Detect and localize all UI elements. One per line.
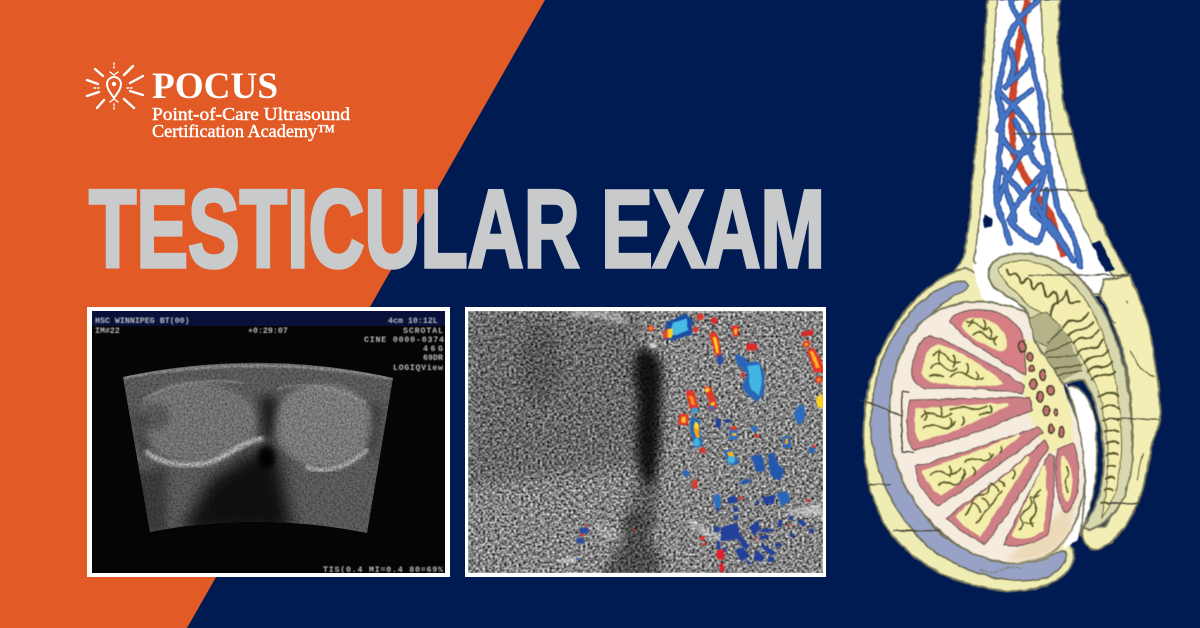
ultrasound overlay text: 46G bbox=[423, 345, 443, 354]
ultrasound overlay text: CINE 0000-0374 bbox=[364, 336, 444, 345]
epididymis bbox=[988, 253, 1161, 550]
testicular artery bbox=[1012, 0, 1064, 257]
white cavity bbox=[972, 263, 1095, 550]
testis body bbox=[890, 302, 1086, 564]
logo: POCUS bbox=[87, 63, 350, 141]
orange diagonal panel bbox=[0, 0, 545, 628]
doppler colour flow blobs bbox=[576, 313, 823, 572]
logo tagline line 2: Certification Academy™ bbox=[152, 121, 335, 141]
title: TESTICULAR EXAM bbox=[89, 168, 825, 291]
spermatic cord bbox=[950, 0, 1137, 300]
white sinus bbox=[1067, 386, 1097, 537]
ultrasound overlay text: HSC WINNIPEG BT(00) bbox=[95, 316, 190, 326]
efferent ductules bbox=[1028, 312, 1060, 347]
ultrasound overlay text: 69DR bbox=[423, 354, 443, 363]
ultrasound overlay text: IM#22 bbox=[95, 327, 120, 336]
doppler speckle image bbox=[467, 310, 823, 577]
lobule tubule fill bbox=[916, 319, 1071, 537]
ultrasound overlay text: 4cm 10:12L bbox=[388, 317, 438, 326]
logo tagline line 1: Point-of-Care Ultrasound bbox=[152, 104, 350, 124]
ultrasound overlay text: TIS(0.4 MI=0.4 80=69% bbox=[323, 565, 443, 575]
tubule squiggles bbox=[922, 320, 1068, 530]
ultrasound fan image bbox=[123, 362, 393, 533]
rete dots bbox=[1018, 341, 1064, 438]
logo wordmark: POCUS bbox=[152, 66, 278, 107]
ultrasound overlay text: SCROTAL bbox=[403, 327, 443, 336]
ultrasound overlay text: +0:29:07 bbox=[248, 327, 288, 336]
ultrasound overlay text bbox=[95, 316, 444, 575]
icon: location pin sunburst bbox=[87, 63, 143, 110]
seminiferous lobules bbox=[906, 310, 1079, 546]
ultrasound overlay text: LOGIQView bbox=[393, 363, 443, 373]
cord cut-outs bbox=[983, 214, 1115, 272]
anatomy illustration: testis and spermatic cord bbox=[860, 0, 1161, 591]
rete testis bbox=[1020, 337, 1073, 453]
pampiniform venous plexus bbox=[996, 0, 1080, 267]
panel: grayscale ultrasound of both testes bbox=[87, 307, 450, 577]
anatomical label leader lines bbox=[860, 275, 1160, 531]
tunica vaginalis crescent bbox=[871, 281, 1067, 581]
panel: colour Doppler ultrasound bbox=[465, 307, 826, 577]
scrotal wall bbox=[863, 268, 1083, 591]
